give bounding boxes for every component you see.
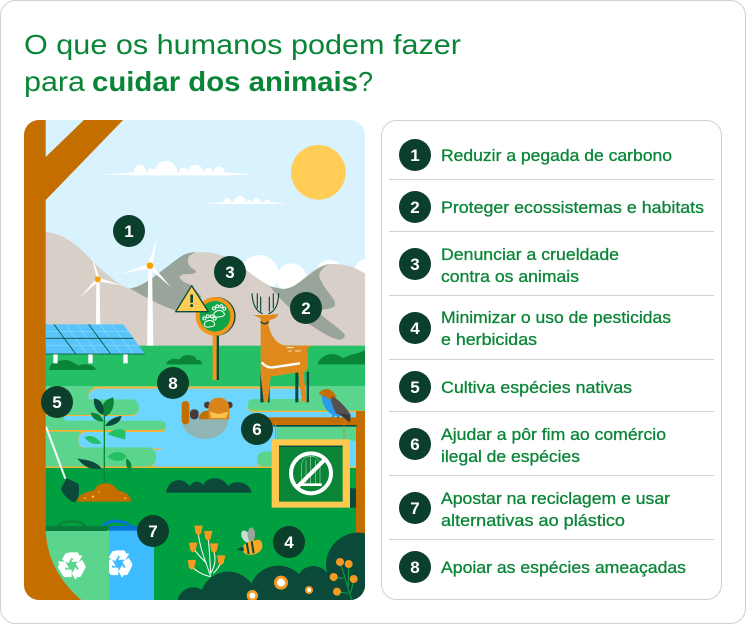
green meadow xyxy=(46,346,365,386)
dark foreground bushes xyxy=(178,532,365,600)
number badge 2 xyxy=(290,292,322,324)
icon: recycling bins: ♻ xyxy=(56,546,88,587)
list item 1: 1 xyxy=(410,146,420,165)
list item 5 xyxy=(399,371,632,403)
list item 8: 8 xyxy=(410,558,420,577)
list item 6: 6 xyxy=(410,435,420,454)
list item 5: Cultiva espécies nativas xyxy=(441,378,632,397)
sky and land scene, upper part xyxy=(40,145,379,394)
number badge 3: 3 xyxy=(225,263,235,282)
number badge 3 xyxy=(214,256,246,288)
number badge 7: 7 xyxy=(148,522,158,541)
title xyxy=(24,29,461,97)
lake xyxy=(40,386,375,468)
list item 8 xyxy=(399,551,686,583)
number badge 4 xyxy=(273,526,305,558)
number badge 6 xyxy=(241,413,273,445)
list item 5: 5 xyxy=(410,378,420,397)
number badge 8: 8 xyxy=(168,374,178,393)
icon: otter xyxy=(182,398,233,439)
list item 2 xyxy=(399,191,704,223)
list item 6: ilegal de espécies xyxy=(441,447,580,466)
dark bush xyxy=(166,478,252,493)
icon: plant xyxy=(77,397,131,502)
list item 7: Apostar na reciclagem e usar xyxy=(441,489,670,508)
cloud small xyxy=(206,196,286,204)
number badge 2: 2 xyxy=(301,299,311,318)
cloud large xyxy=(100,161,254,176)
number badge 8 xyxy=(157,367,189,399)
list item 7: 7 xyxy=(410,499,420,518)
title: para xyxy=(24,66,85,97)
list item 4: Minimizar o uso de pesticidas xyxy=(441,308,671,327)
meadow band xyxy=(46,386,305,448)
list item 1 xyxy=(399,139,672,171)
list item 7: alternativas ao plástico xyxy=(441,511,625,530)
panel: action list xyxy=(382,120,722,600)
icon: bee xyxy=(236,527,262,555)
icon: shovel xyxy=(46,427,79,502)
icon: solar panel xyxy=(46,324,145,363)
list item 4: e herbicidas xyxy=(441,330,537,349)
icon: bush flowers xyxy=(247,558,358,601)
number badge 1 xyxy=(113,215,145,247)
icon: no caged animals sign xyxy=(272,422,356,508)
list item 3 xyxy=(399,245,619,286)
clouds behind mountains xyxy=(244,255,365,289)
icon: wind turbines xyxy=(80,237,171,347)
list item 6 xyxy=(399,425,666,466)
icon: flowers xyxy=(188,526,225,577)
icon: wooden beam and post xyxy=(267,411,366,535)
panel: illustration xyxy=(24,120,365,600)
icon: recycling bins xyxy=(40,521,154,601)
bushes xyxy=(49,348,367,370)
icon: sun xyxy=(291,145,346,200)
list item 2: Proteger ecossistemas e habitats xyxy=(441,198,704,217)
list item 4: 4 xyxy=(410,319,420,338)
list item 8: Apoiar as espécies ameaçadas xyxy=(441,558,686,577)
lake scene xyxy=(46,386,365,600)
list item 4 xyxy=(399,308,671,349)
lower meadow xyxy=(40,468,370,601)
number badge 4: 4 xyxy=(284,533,294,552)
icon: warning triangle xyxy=(176,286,208,312)
icon: bird xyxy=(319,389,351,423)
icon: deer xyxy=(252,293,312,402)
icon: paws xyxy=(203,305,226,327)
icon: animal protection sign xyxy=(176,286,236,380)
list item 6: Ajudar a pôr fim ao comércio xyxy=(441,425,666,444)
list item 3: contra os animais xyxy=(441,267,579,286)
number badge 5 xyxy=(41,386,73,418)
number badge 6: 6 xyxy=(252,420,262,439)
list item 7 xyxy=(399,489,670,530)
list item 3: Denunciar a crueldade xyxy=(441,245,619,264)
tree trunk and branch xyxy=(20,116,127,604)
mountains xyxy=(40,232,367,347)
number badge 7 xyxy=(137,515,169,547)
title: ? xyxy=(358,66,373,97)
list item 1: Reduzir a pegada de carbono xyxy=(441,146,672,165)
list item 3: 3 xyxy=(410,255,420,274)
number badge 5: 5 xyxy=(52,393,62,412)
title: O que os humanos podem fazer xyxy=(24,29,461,60)
title: cuidar dos animais xyxy=(92,66,358,97)
icon: recycling bins: ♻ xyxy=(102,545,134,586)
list item 2: 2 xyxy=(410,198,420,217)
number badge 1: 1 xyxy=(124,222,134,241)
